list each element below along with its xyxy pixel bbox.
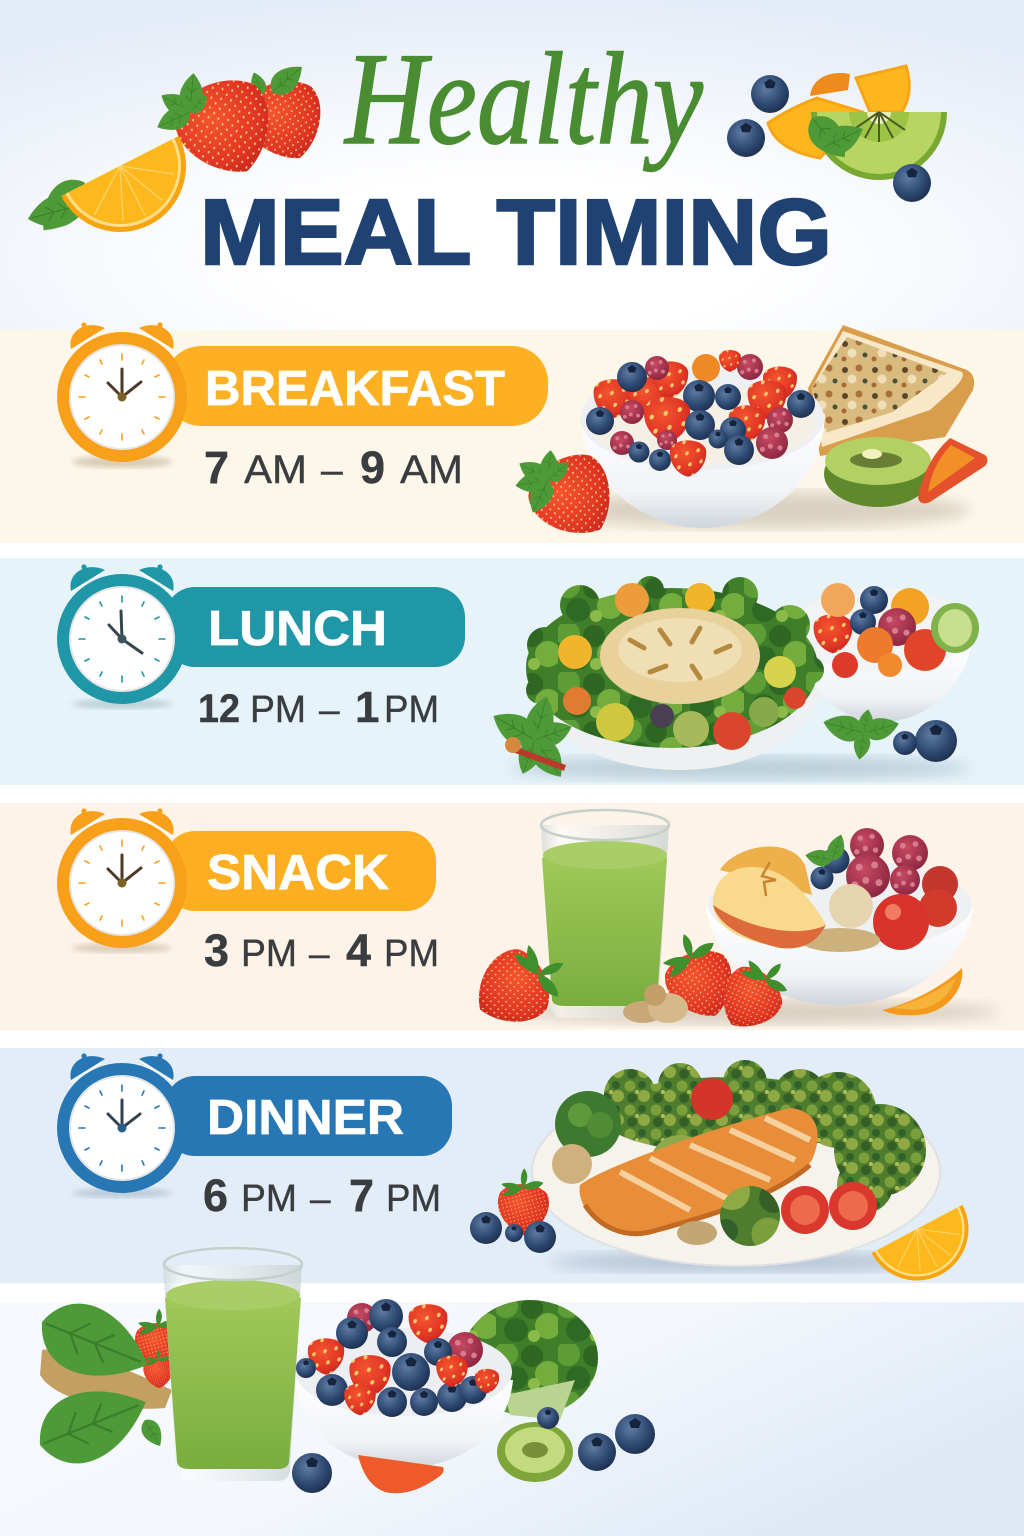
panel: footer foods (0, 1248, 1024, 1536)
icon: clock (57, 1053, 187, 1198)
time: 7 AM – 9 AM: 9 (360, 442, 385, 493)
panel: header (0, 0, 1024, 330)
food: orange slice (882, 968, 962, 1015)
band background (0, 558, 1024, 785)
label pill: LUNCH (165, 587, 465, 667)
food: kiwi half (824, 437, 932, 507)
time: 7 AM – 9 AM: AM (244, 448, 307, 492)
panel: breakfast (0, 322, 1024, 555)
food: berry bowl (295, 1299, 513, 1468)
time: 12 PM – 1 PM: 12 (198, 687, 240, 731)
time: 6 PM – 7 PM: – (310, 1178, 331, 1219)
time: 3 PM – 4 PM: PM (241, 933, 297, 975)
label pill: BREAKFAST (165, 346, 548, 426)
time: 6 PM – 7 PM: 6 (203, 1170, 228, 1221)
band background (0, 330, 1024, 543)
icon: clock (57, 322, 187, 468)
panel: dinner (0, 1048, 1024, 1299)
label pill: DINNER: DINNER (207, 1091, 404, 1145)
time: 3 PM – 4 PM: 4 (346, 925, 371, 976)
time: 3 PM – 4 PM: PM (384, 933, 439, 975)
icon: clock (57, 564, 187, 709)
food: herb (486, 693, 576, 785)
food: strawberries and walnuts (462, 923, 803, 1042)
time: 12 PM – 1 PM: PM (384, 689, 439, 731)
time: 7 AM – 9 AM: 7 (204, 442, 229, 493)
time: 3 PM – 4 PM: 3 (204, 925, 229, 976)
food: lunch plates (486, 576, 979, 785)
food: strawberry (514, 441, 631, 555)
panel: snack (0, 803, 1024, 1042)
time: 3 PM – 4 PM: – (309, 933, 330, 974)
food: dinner plate (532, 1060, 987, 1299)
band background (0, 803, 1024, 1030)
food: berries (470, 1168, 556, 1253)
title: MEAL TIMING: MEAL TIMING (200, 180, 832, 284)
food: loose fruit (292, 1407, 655, 1493)
band background (0, 1048, 1024, 1283)
food: breakfast bowl (514, 325, 988, 555)
food: orange wedge (872, 1205, 987, 1299)
label pill: SNACK: SNACK (207, 846, 389, 900)
food: bowl (580, 414, 825, 528)
icon: left fruit cluster (24, 58, 334, 255)
label pill: SNACK (165, 831, 436, 911)
food: salad plate (526, 576, 824, 770)
band background (0, 1302, 1024, 1536)
food: side bowl (789, 583, 979, 722)
time: 7 AM – 9 AM: – (321, 449, 343, 492)
food: broccoli (462, 1300, 598, 1420)
icon: clock (57, 808, 187, 953)
food: green smoothie glass (163, 1248, 302, 1481)
time: 7 AM – 9 AM: AM (400, 448, 463, 492)
food: toast (808, 325, 974, 456)
food: green smoothie glass (541, 810, 669, 1018)
icon: right fruit cluster (727, 66, 947, 202)
food: salmon fillet (580, 1108, 818, 1236)
food: orange piece (918, 438, 988, 503)
food: bowl (706, 828, 973, 1005)
food: apple slices (713, 846, 826, 948)
panel: lunch (0, 558, 1024, 785)
food: snack scene (462, 810, 1000, 1042)
time: 12 PM – 1 PM: – (319, 689, 340, 730)
time: 12 PM – 1 PM: 1 (355, 683, 379, 732)
label pill: LUNCH: LUNCH (208, 602, 387, 656)
food: bread and leaves (27, 1290, 182, 1477)
title: Healthy: Healthy (343, 25, 703, 172)
food: mint and berries (820, 708, 957, 762)
label pill: DINNER (165, 1076, 452, 1156)
header background (0, 0, 1024, 330)
time: 12 PM – 1 PM: PM (250, 689, 306, 731)
label pill: BREAKFAST: BREAKFAST (205, 362, 505, 416)
time: 6 PM – 7 PM: PM (386, 1178, 441, 1220)
time: 6 PM – 7 PM: PM (241, 1178, 297, 1220)
time: 6 PM – 7 PM: 7 (349, 1170, 374, 1221)
